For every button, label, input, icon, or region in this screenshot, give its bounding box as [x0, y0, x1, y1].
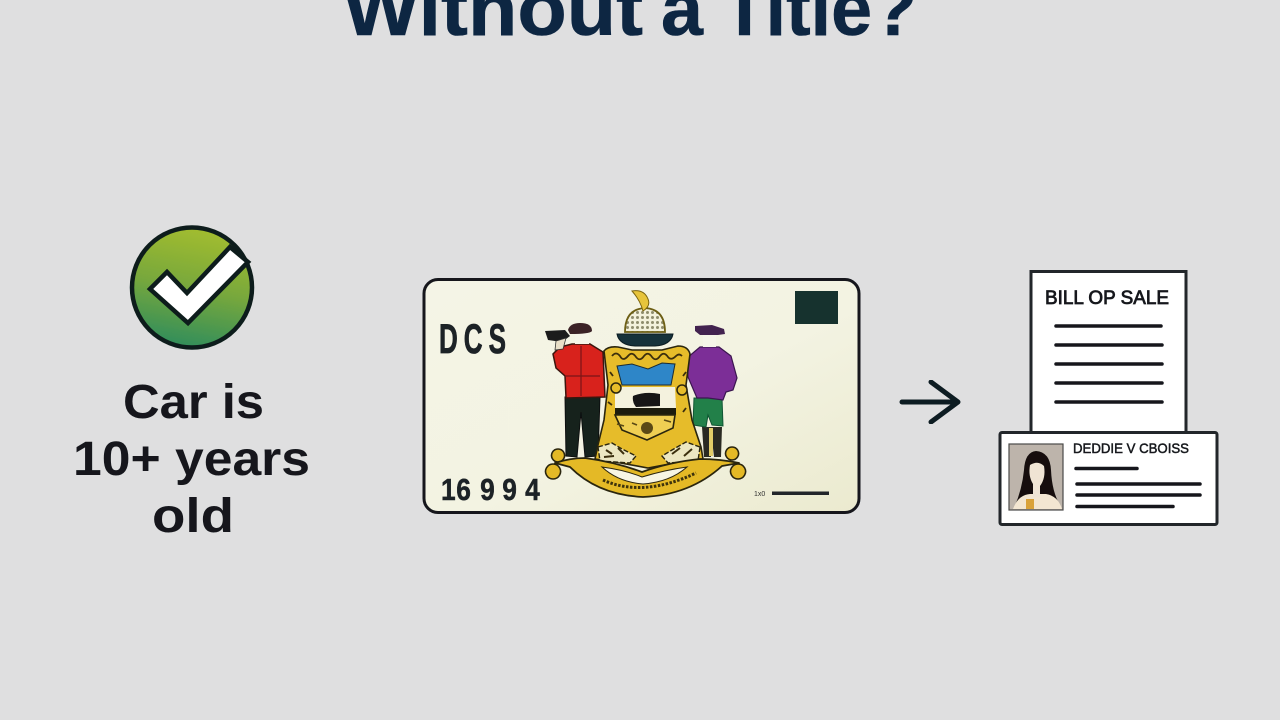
panel: required documents: [1000, 272, 1217, 524]
ID photo: [1009, 444, 1063, 510]
panel: Delaware license plate: [424, 280, 859, 512]
state seal: [545, 291, 746, 497]
mantling: [598, 442, 700, 463]
document: bill of sale: [1031, 272, 1186, 432]
plate number: 16994: [441, 473, 540, 508]
plate text top: DCS: [439, 316, 506, 363]
arrow: [902, 382, 958, 422]
shield: [595, 346, 703, 468]
document: ID card: DEDDIE V CBOISS: [1073, 440, 1189, 456]
icon: green check mark: [132, 228, 252, 348]
figure: left man in red: [545, 323, 605, 457]
crest: wheat sheaf and bowl: [617, 291, 673, 346]
small plate mark: 1x0: [754, 491, 765, 498]
label: car is 10+ years old: 10+ years: [73, 433, 310, 486]
document: ID card: [1000, 432, 1217, 524]
label: car is 10+ years old: old: [152, 490, 234, 543]
registration sticker: [795, 291, 838, 324]
small plate mark: [754, 491, 829, 498]
ribbon banner: [546, 447, 746, 497]
label: car is 10+ years old: Car is: [123, 376, 264, 429]
plate body: [424, 280, 859, 512]
figure: right man in purple: [687, 325, 737, 457]
panel: car age condition: [73, 228, 310, 543]
document: bill of sale: BILL OP SALE: [1045, 288, 1169, 309]
label: car is 10+ years old: [73, 376, 310, 543]
